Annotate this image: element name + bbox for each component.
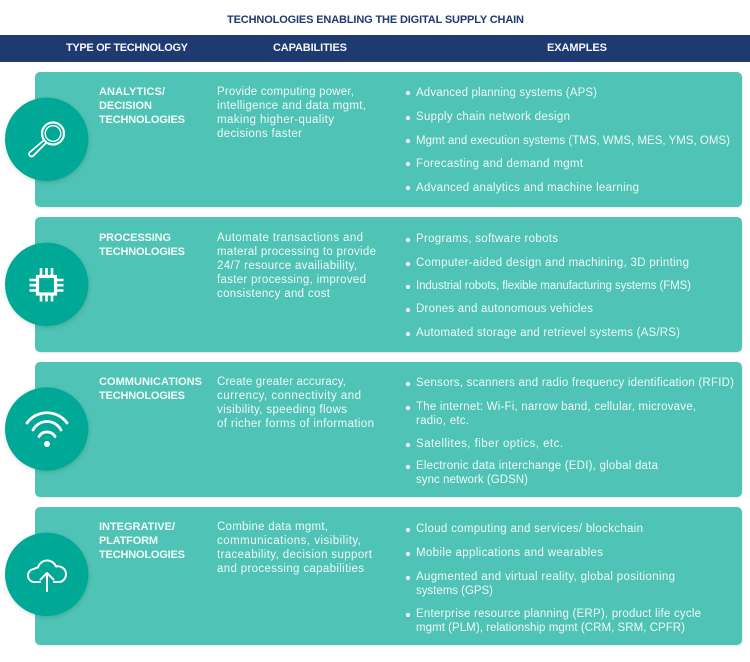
capabilities text: traceability, decision support bbox=[217, 549, 373, 561]
examples list: Augmented and virtual reality, global positioning bbox=[416, 571, 675, 583]
examples list: sync network (GDSN) bbox=[416, 474, 528, 486]
capabilities text: and processing capabilities bbox=[217, 563, 364, 575]
capabilities text: Provide computing power, bbox=[217, 86, 354, 98]
capabilities text: faster processing, improved bbox=[217, 274, 366, 286]
examples list: The internet: Wi-Fi, narrow band, cellular, microvave, bbox=[416, 401, 696, 413]
capabilities text: Create greater accuracy, bbox=[217, 376, 346, 388]
capabilities text bbox=[217, 232, 376, 300]
examples list: Industrial robots, flexible manufacturing systems (FMS) bbox=[416, 280, 691, 292]
label: integrative bbox=[99, 521, 185, 561]
label: communications bbox=[99, 376, 202, 402]
examples list: Enterprise resource planning (ERP), product life cycle bbox=[416, 608, 701, 620]
capabilities text: Automate transactions and bbox=[217, 232, 363, 244]
label: processing: TECHNOLOGIES bbox=[99, 246, 185, 258]
examples list: Mgmt and execution systems (TMS, WMS, MES, YMS, OMS) bbox=[416, 135, 730, 147]
capabilities text: consistency and cost bbox=[217, 288, 331, 300]
label: processing bbox=[99, 232, 185, 258]
label: analytics bbox=[99, 86, 185, 126]
title: TECHNOLOGIES ENABLING THE DIGITAL SUPPLY CHAIN bbox=[227, 14, 524, 26]
label: communications: TECHNOLOGIES bbox=[99, 390, 185, 402]
capabilities text: of richer forms of information bbox=[217, 418, 374, 430]
icon: magnifying glass bbox=[5, 98, 88, 181]
examples list: Drones and autonomous vehicles bbox=[416, 303, 593, 315]
examples list: Mobile applications and wearables bbox=[416, 547, 603, 559]
label: analytics: DECISION bbox=[99, 100, 152, 112]
examples list: radio, etc. bbox=[416, 415, 469, 427]
examples list: Cloud computing and services/ blockchain bbox=[416, 523, 643, 535]
examples list: Advanced planning systems (APS) bbox=[416, 87, 597, 99]
label: integrative: PLATFORM bbox=[99, 535, 158, 547]
capabilities text: 24/7 resource availiability, bbox=[217, 260, 357, 272]
panel: integrative / platform technologies bbox=[5, 507, 742, 645]
examples list: Advanced analytics and machine learning bbox=[416, 182, 639, 194]
column heading: capabilities: CAPABILITIES bbox=[273, 42, 347, 54]
capabilities text: materal processing to provide bbox=[217, 246, 376, 258]
examples list: Supply chain network design bbox=[416, 111, 570, 123]
examples list: Computer-aided design and machining, 3D printing bbox=[416, 257, 689, 269]
panel: analytics / decision technologies bbox=[5, 72, 742, 207]
examples list: Electronic data interchange (EDI), global data bbox=[416, 460, 659, 472]
panel: processing technologies bbox=[5, 217, 742, 352]
examples list: Sensors, scanners and radio frequency identification (RFID) bbox=[416, 377, 734, 389]
examples list: systems (GPS) bbox=[416, 585, 493, 597]
label: analytics: TECHNOLOGIES bbox=[99, 114, 185, 126]
examples list bbox=[406, 87, 730, 194]
capabilities text bbox=[217, 521, 373, 575]
panel: communications technologies bbox=[5, 362, 742, 497]
capabilities text: Combine data mgmt, bbox=[217, 521, 328, 533]
examples list bbox=[406, 523, 701, 634]
column heading: examples: EXAMPLES bbox=[547, 42, 607, 54]
icon: wifi bbox=[5, 387, 88, 471]
capabilities text: visibility, speeding flows bbox=[217, 404, 347, 416]
capabilities text: making higher-quality bbox=[217, 114, 334, 126]
examples list: Satellites, fiber optics, etc. bbox=[416, 438, 563, 450]
column heading: type of technology: TYPE OF TECHNOLOGY bbox=[66, 42, 189, 54]
icon: cloud upload bbox=[5, 533, 88, 616]
capabilities text: currency, connectivity and bbox=[217, 390, 361, 402]
capabilities text: decisions faster bbox=[217, 128, 302, 140]
header band bbox=[0, 35, 750, 62]
capabilities text bbox=[217, 86, 366, 140]
label: integrative: TECHNOLOGIES bbox=[99, 549, 185, 561]
examples list: mgmt (PLM), relationship mgmt (CRM, SRM, CPFR) bbox=[416, 622, 685, 634]
examples list bbox=[406, 233, 691, 339]
icon: microchip bbox=[5, 243, 88, 326]
label: integrative: INTEGRATIVE/ bbox=[99, 521, 175, 533]
examples list: Automated storage and retrievel systems (AS/RS) bbox=[416, 327, 680, 339]
capabilities text: intelligence and data mgmt, bbox=[217, 100, 366, 112]
examples list: Forecasting and demand mgmt bbox=[416, 158, 584, 170]
label: communications: COMMUNICATIONS bbox=[99, 376, 202, 388]
label: processing: PROCESSING bbox=[99, 232, 171, 244]
examples list bbox=[406, 377, 734, 486]
examples list: Programs, software robots bbox=[416, 233, 558, 245]
capabilities text: communications, visibility, bbox=[217, 535, 361, 547]
label: analytics: ANALYTICS/ bbox=[99, 86, 165, 98]
capabilities text bbox=[217, 376, 374, 430]
